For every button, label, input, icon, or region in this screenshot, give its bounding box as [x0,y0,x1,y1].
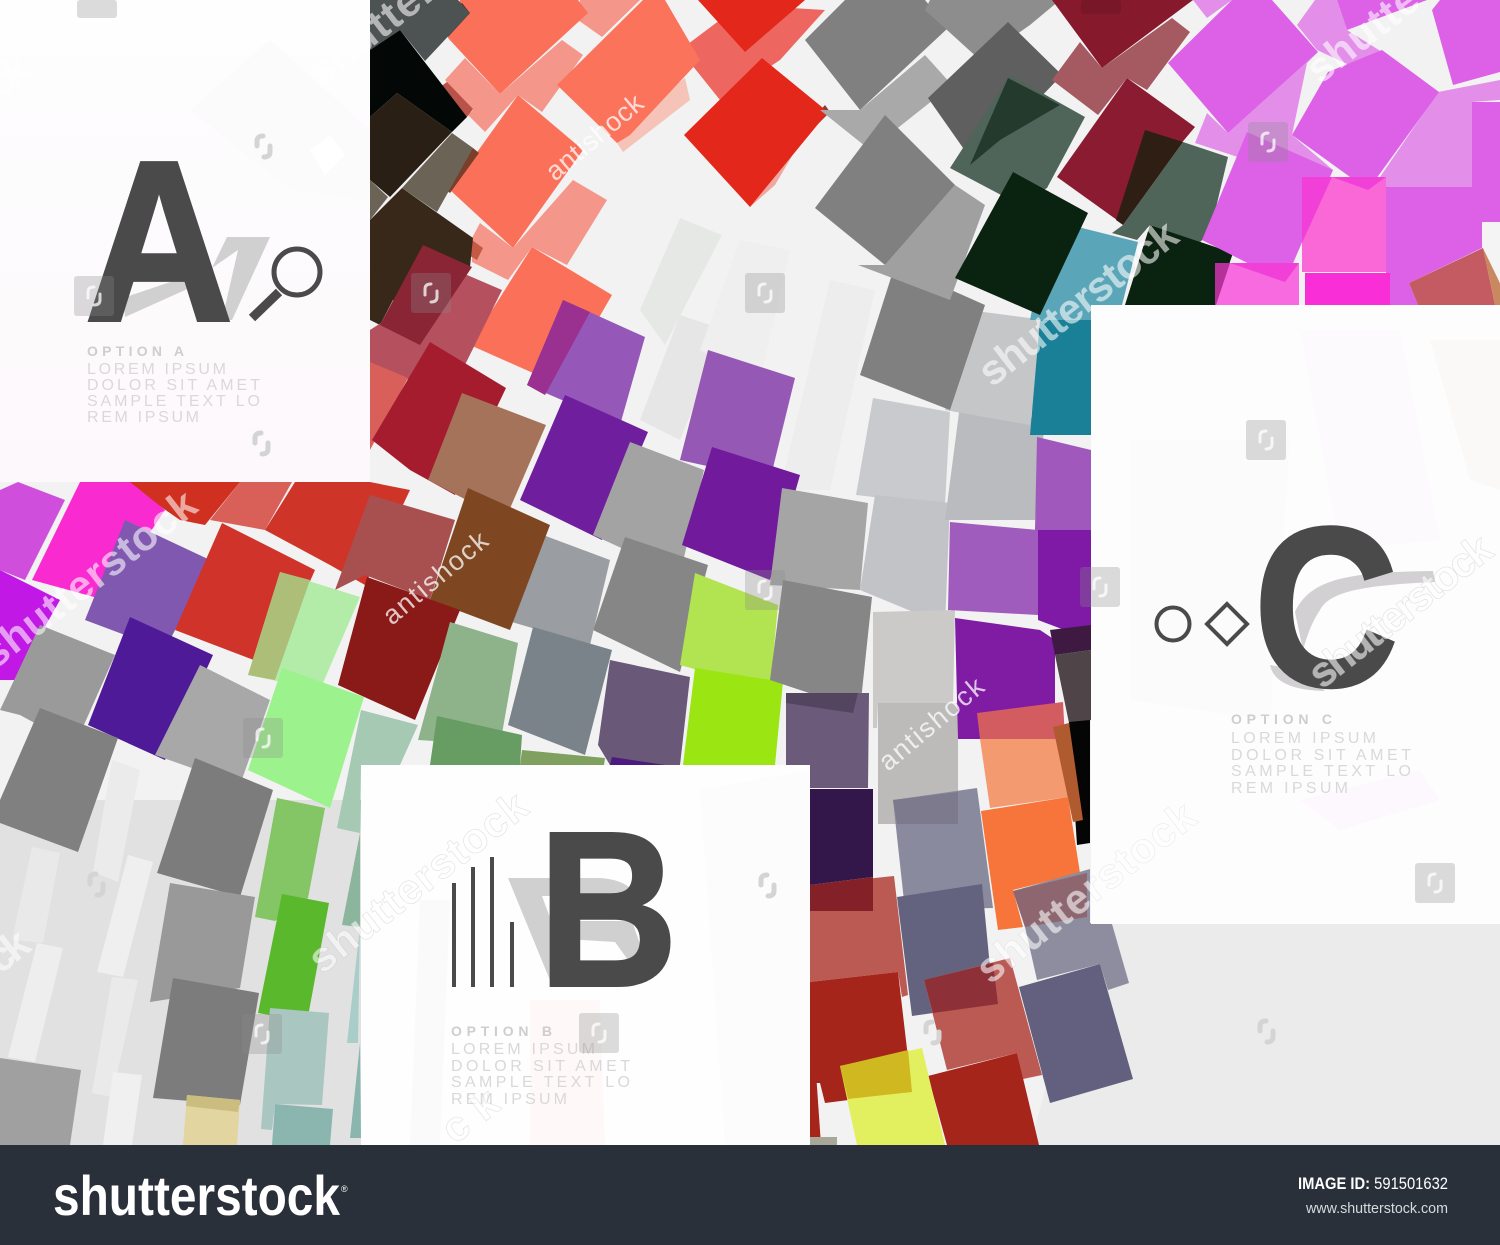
heading: letter A: A [85,115,233,369]
mosaic: top right magenta tiles [1168,0,1500,305]
icon: vertical bars [452,857,514,987]
icon: A shadow [123,237,270,320]
panel: option C [1091,305,1500,924]
text block: option B: OPTION B [451,1023,552,1039]
panel: option A [0,0,370,482]
icon: C shadow [1270,571,1435,691]
heading: letter B: B [538,786,678,1032]
text block: option C: REM IPSUM [1231,780,1348,797]
panel: option B [361,765,810,1145]
mosaic: centre grey and lime tiles [508,398,1045,885]
watermarks: antishock [377,525,494,631]
text block: option B: LOREM IPSUM [451,1041,595,1058]
watermarks: antishock [873,671,990,777]
text block: option A: SAMPLE TEXT LO [87,393,260,410]
text block: option A: LOREM IPSUM [87,361,226,378]
text block: option C: DOLOR SIT AMET [1231,747,1411,764]
mosaic: top grey, green and maroon tiles [805,0,1233,315]
footer image id: IMAGE ID: 591501632 [1298,1174,1448,1193]
text block: option A: REM IPSUM [87,409,199,426]
text block: option B [451,1023,630,1108]
icon: circle and diamond [1156,604,1247,644]
watermarks: shutterstock [299,782,537,982]
heading: letter C: C [1254,480,1398,733]
watermarks: antishock [540,87,650,187]
icon: magnifying glass [252,249,320,318]
footer logo: shutterstock [53,1164,341,1227]
icon: B shadow [508,878,642,985]
text block: option A [87,343,260,426]
text block: option B: SAMPLE TEXT LO [451,1074,630,1091]
watermarks: shutterstock [969,210,1187,395]
text block: option C: SAMPLE TEXT LO [1231,763,1411,780]
text block: option A: DOLOR SIT AMET [87,377,260,394]
watermark icons [74,0,1455,1054]
footer registered mark: ® [341,1184,348,1194]
background: faint grey tiles [0,218,875,1145]
watermarks: shutterstock [967,792,1205,992]
text block: option A: OPTION A [87,343,184,359]
mosaic: left red, magenta and purple tiles [0,482,460,1145]
text block: option C [1231,711,1411,797]
mosaic: right purple, teal and orange tiles [810,220,1138,1145]
footer bar [0,1145,1500,1245]
text block: option B: DOLOR SIT AMET [451,1058,630,1075]
text block: option C: LOREM IPSUM [1231,730,1376,747]
footer url: www.shutterstock.com [1305,1200,1448,1217]
watermarks: shutterstock [1299,524,1500,697]
mosaic: top salmon and red squares [436,0,830,425]
mosaic: green tiles [183,572,605,1145]
text block: option C: OPTION C [1231,711,1332,727]
watermarks: ck [432,1078,508,1152]
text block: option B: REM IPSUM [451,1091,567,1108]
mosaic: dark column and red tiles [370,0,800,672]
